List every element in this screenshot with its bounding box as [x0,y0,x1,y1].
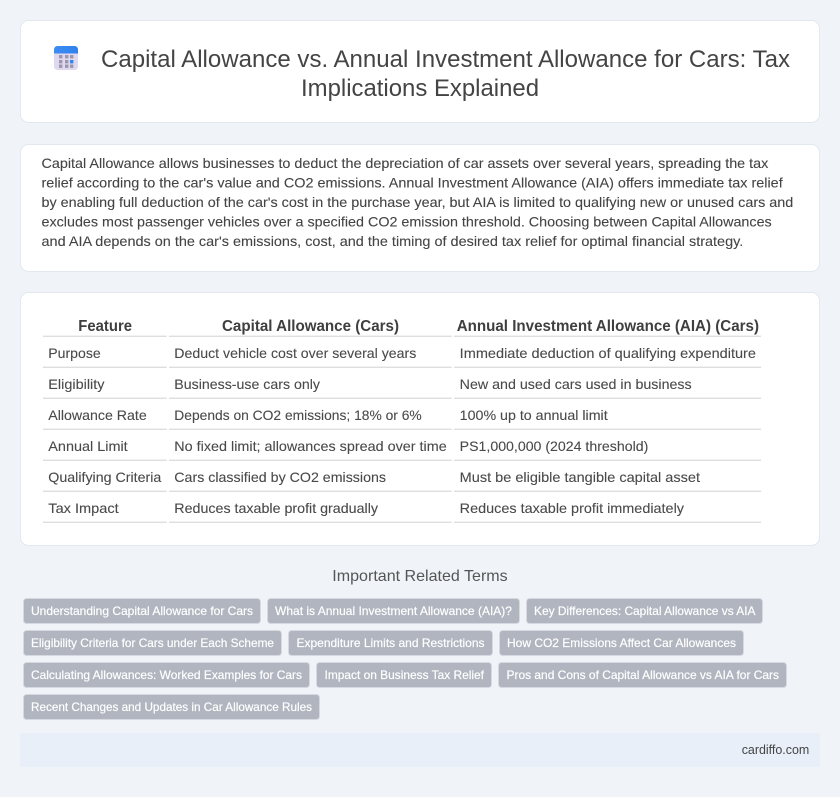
row: tax impact [48,500,684,516]
icon: calendar [54,46,78,70]
table header: Annual Investment Allowance (AIA) (Cars) [457,318,759,335]
row: allowance rate: 100% up to annual limit [460,407,608,423]
text block: summary: by enabling full deduction of the car's cost in the purchase year, but AIA is limited to qualifying new or unused cars and [42,194,793,210]
row: qualifying criteria: Cars classified by CO2 emissions [174,469,386,485]
text block: summary: and AIA depends on the car's emissions, cost, and the timing of desired tax relief for optimal financial strategy. [42,233,743,249]
tag group: related terms: Recent Changes and Updates in Car Allowance Rules [31,700,312,714]
tag group: related terms: Expenditure Limits and Restrictions [296,636,484,650]
text block: summary: relief according to the car's value and CO2 emissions. Annual Investment Allowance (AIA) offers immediate tax relief [42,174,783,190]
row: purpose [48,345,756,361]
title [101,46,790,102]
text block: summary [42,155,793,249]
row: annual limit: Annual Limit [48,438,128,454]
title: Implications Explained [301,75,539,102]
row: qualifying criteria: Must be eligible tangible capital asset [460,469,700,485]
row: eligibility: Eligibility [48,376,104,392]
row: allowance rate [48,407,608,423]
row: qualifying criteria [48,469,700,485]
panel: header [20,20,820,122]
tag group: related terms: What is Annual Investment Allowance (AIA)? [275,604,512,618]
panel: intro text [20,144,820,272]
tag group: related terms: Calculating Allowances: Worked Examples for Cars [31,668,302,682]
tag group: related terms: Pros and Cons of Capital Allowance vs AIA for Cars [506,668,779,682]
panel: comparison table [20,292,820,546]
table header: Capital Allowance (Cars) [222,318,399,335]
tag group: related terms: Key Differences: Capital Allowance vs AIA [534,604,756,618]
row: purpose: Immediate deduction of qualifying expenditure [460,345,756,361]
row: eligibility: New and used cars used in business [460,376,692,392]
row: allowance rate: Depends on CO2 emissions; 18% or 6% [174,407,422,423]
row: eligibility: Business-use cars only [174,376,320,392]
row: qualifying criteria: Qualifying Criteria [48,469,162,485]
row: tax impact: Tax Impact [48,500,119,516]
title: Capital Allowance vs. Annual Investment Allowance for Cars: Tax [101,46,790,73]
row: tax impact: Reduces taxable profit immediately [460,500,684,516]
tag group: related terms: Understanding Capital Allowance for Cars [31,604,253,618]
table header [78,318,759,335]
tag group: related terms: Eligibility Criteria for Cars under Each Scheme [31,636,274,650]
row: eligibility [48,376,692,392]
row: purpose: Deduct vehicle cost over several years [174,345,416,361]
row: annual limit: PS1,000,000 (2024 threshold) [460,438,648,454]
footer [20,733,820,767]
tag group: related terms: Impact on Business Tax Relief [324,668,485,682]
row: purpose: Purpose [48,345,101,361]
row: tax impact: Reduces taxable profit gradually [174,500,378,516]
text block: summary: Capital Allowance allows businesses to deduct the depreciation of car assets over several years, spreading the tax [42,155,768,171]
row: annual limit: No fixed limit; allowances spread over time [174,438,447,454]
table header: Feature [78,318,132,335]
tag group: related terms [24,598,786,720]
tag group: related terms: How CO2 Emissions Affect Car Allowances [507,636,736,650]
row: annual limit [48,438,648,454]
heading: related terms: Important Related Terms [332,568,508,585]
text block: summary: excludes most passenger vehicles over a specified CO2 emission threshold. Choosing between Capital Allowances [42,214,772,230]
footer: cardiffo.com [742,742,809,757]
row: allowance rate: Allowance Rate [48,407,147,423]
